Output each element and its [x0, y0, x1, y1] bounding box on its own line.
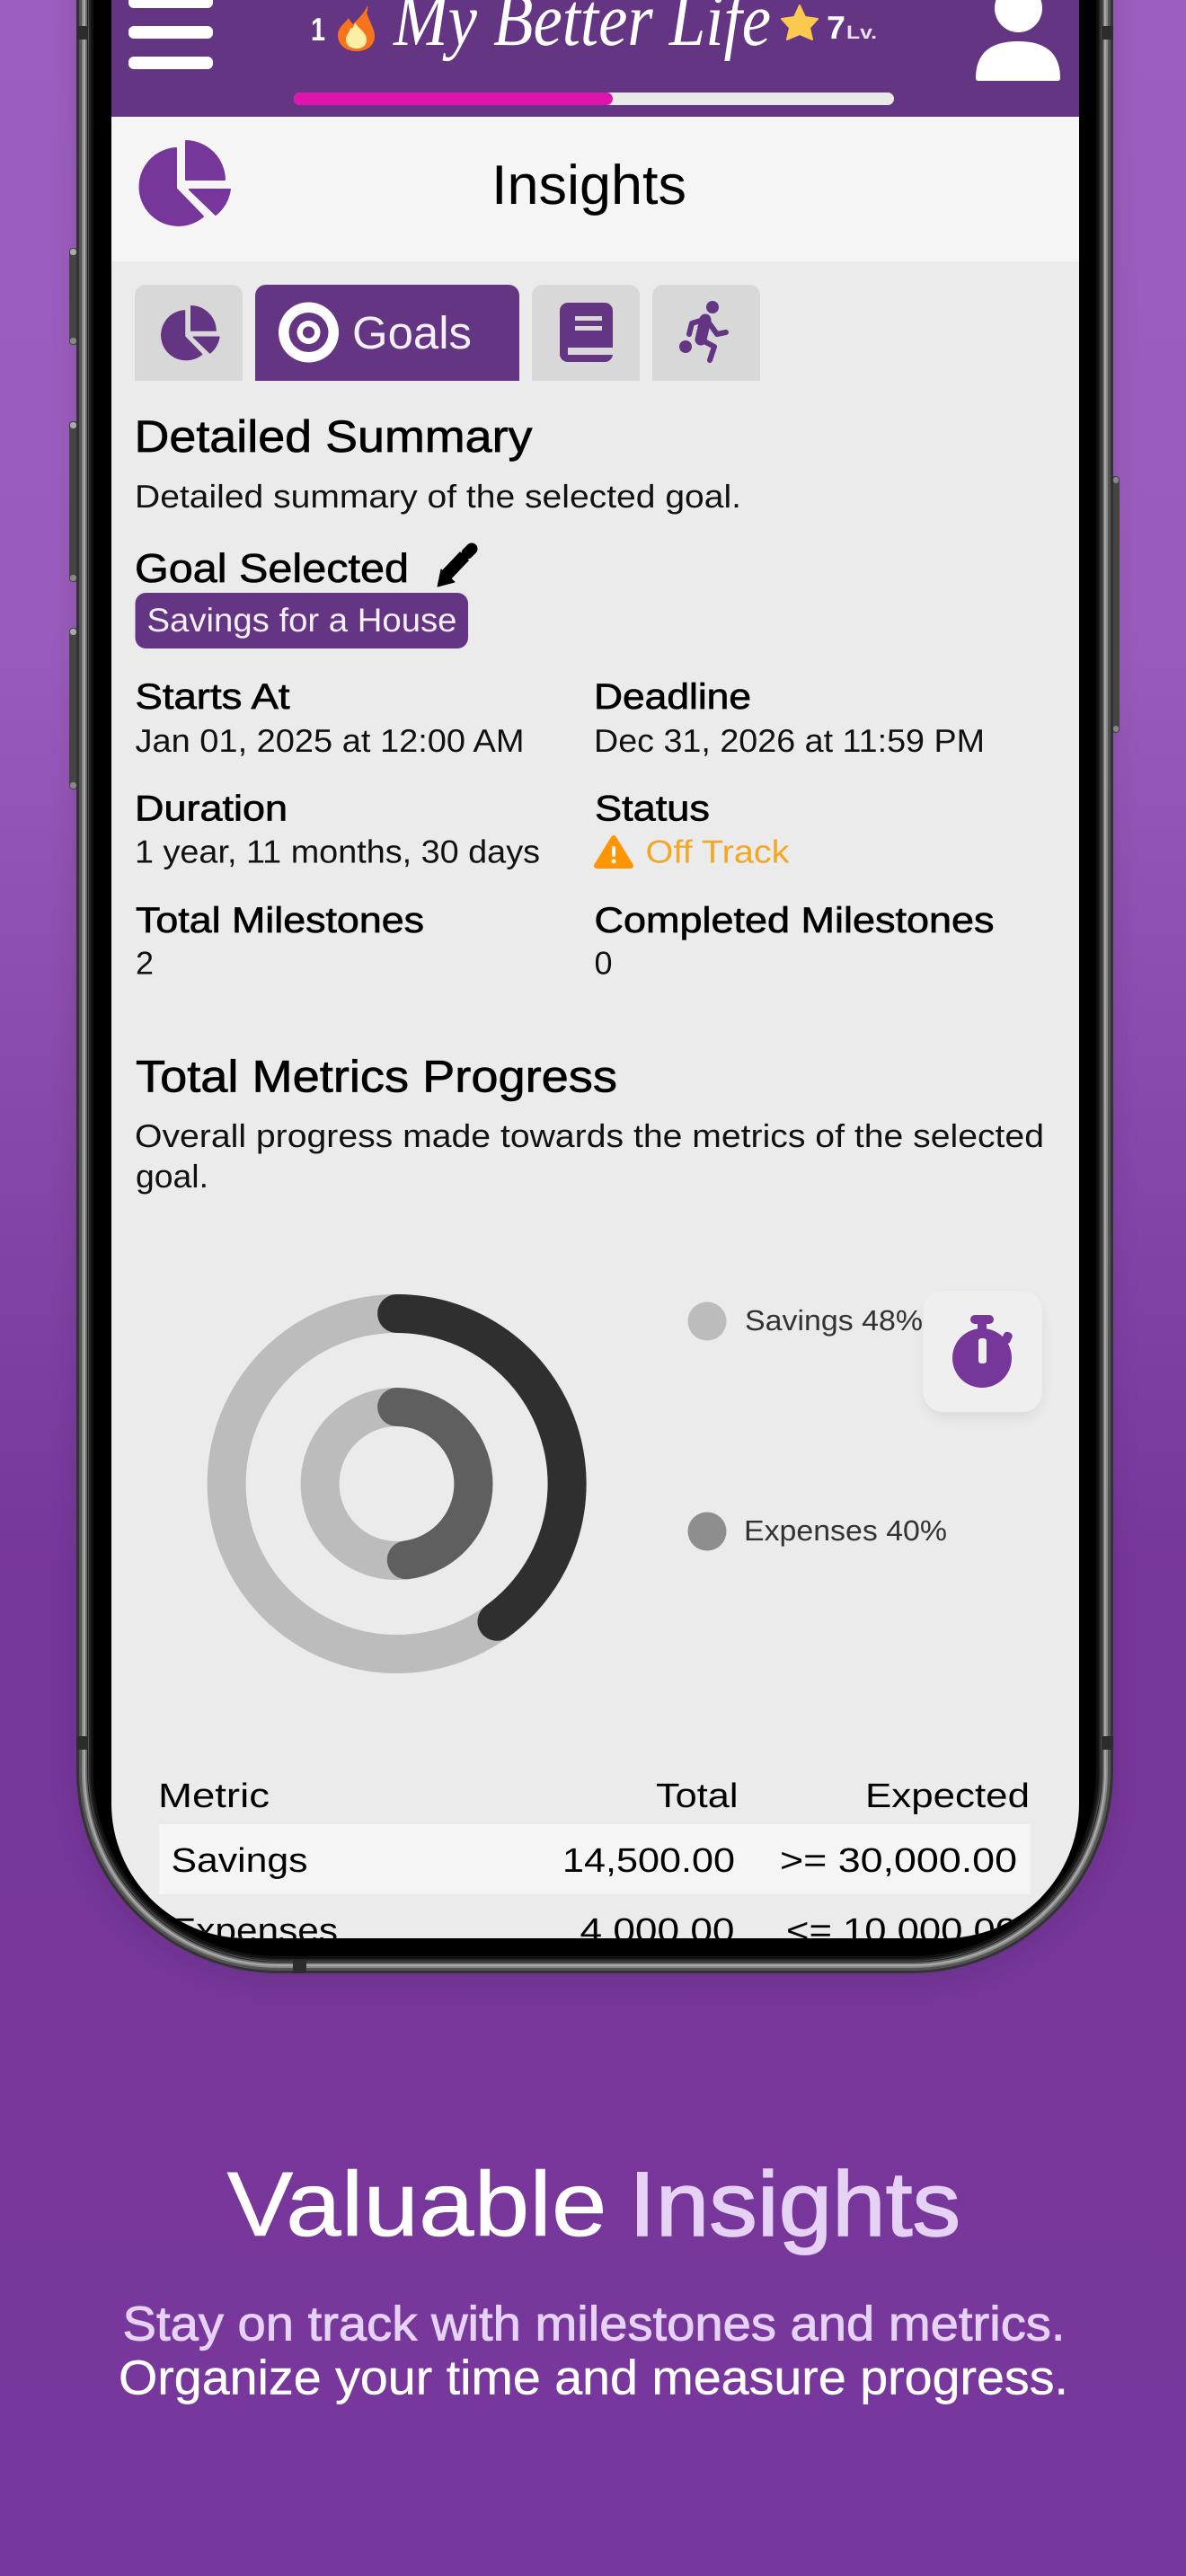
- total metrics heading: Total Metrics Progress: [136, 1051, 617, 1101]
- icon: warning: [597, 838, 631, 866]
- status: Status: [595, 789, 710, 828]
- status: [595, 789, 791, 869]
- row: expenses: Expenses: [171, 1912, 338, 1950]
- icon: pie chart: [140, 141, 230, 225]
- goal selected heading: Goal Selected: [135, 545, 409, 591]
- left side buttons: [69, 248, 78, 790]
- starts at: [136, 683, 521, 756]
- duration: Duration: [135, 789, 288, 828]
- phone screen: [111, 0, 1079, 1950]
- table header: [158, 1778, 1030, 1815]
- screen title: Insights: [491, 154, 686, 216]
- table header: Metric: [158, 1778, 270, 1815]
- icon: user: [976, 0, 1060, 81]
- phone frame: [69, 0, 1120, 1981]
- legend: expenses: [688, 1513, 947, 1550]
- floating timer button: [924, 1291, 1042, 1417]
- tab bar: [135, 285, 760, 381]
- donut chart: [226, 1313, 567, 1654]
- icon: star: [782, 5, 818, 40]
- row: expenses: <= 10,000.00: [786, 1912, 1017, 1950]
- icon: target: [279, 302, 339, 363]
- deadline: Deadline: [594, 677, 751, 717]
- selected goal pill: Savings for a House: [147, 602, 456, 639]
- row: savings: [159, 1824, 1030, 1894]
- table header: Expected: [865, 1778, 1030, 1815]
- starts at: Jan 01, 2025 at 12:00 AM: [135, 722, 525, 759]
- subheading line two: Organize your time and measure progress.: [119, 2351, 1068, 2405]
- detailed summary description: Detailed summary of the selected goal.: [135, 478, 741, 515]
- headline: Valuable: [226, 2153, 607, 2255]
- page title band: [111, 117, 1079, 261]
- duration: 1 year, 11 months, 30 days: [135, 834, 540, 869]
- icon: stopwatch: [952, 1315, 1013, 1388]
- completed milestones: [595, 905, 994, 975]
- total milestones: Total Milestones: [136, 901, 424, 940]
- total milestones: [137, 905, 423, 974]
- tab: activity: [652, 285, 760, 381]
- status: Off Track: [645, 834, 791, 869]
- tab: goals active: [255, 285, 519, 381]
- legend: savings: Savings 48%: [745, 1304, 923, 1337]
- icon: pencil: [438, 549, 472, 587]
- icon: flame: [338, 5, 375, 51]
- row: savings: >= 30,000.00: [780, 1842, 1017, 1880]
- deadline: [597, 683, 982, 756]
- progress bar: [294, 93, 894, 105]
- total metrics description: Overall progress made towards the metrics of the selected: [135, 1117, 1044, 1154]
- row: savings: Savings: [171, 1842, 307, 1880]
- row: expenses: 4,000.00: [580, 1912, 735, 1950]
- right side button: [1111, 476, 1120, 733]
- legend: savings: [688, 1302, 923, 1340]
- metrics table: [158, 1778, 1030, 1950]
- subheading line one: Stay on track with milestones and metrics.: [122, 2298, 1066, 2351]
- detailed summary heading: Detailed Summary: [135, 411, 532, 462]
- total milestones: 2: [136, 945, 154, 981]
- deadline: Dec 31, 2026 at 11:59 PM: [594, 722, 985, 759]
- headline: Insights: [629, 2153, 960, 2255]
- level label: 7: [827, 9, 845, 46]
- table header: Total: [656, 1778, 739, 1815]
- app header bar: Lv.: [846, 22, 877, 43]
- row: expenses: [171, 1912, 1017, 1950]
- completed milestones: Completed Milestones: [595, 901, 994, 940]
- duration: [135, 789, 540, 869]
- legend: expenses: Expenses 40%: [744, 1514, 947, 1547]
- starts at: Starts At: [135, 677, 289, 717]
- total metrics description: goal.: [136, 1158, 208, 1195]
- row: savings: 14,500.00: [562, 1842, 735, 1880]
- streak count: 1: [311, 11, 325, 48]
- icon: menu: [128, 0, 213, 69]
- tab label: Goals: [352, 307, 472, 358]
- tab: journal: [532, 285, 640, 381]
- app header bar: [111, 0, 1079, 117]
- headline: [226, 2153, 960, 2255]
- total metrics description: [135, 1117, 1044, 1195]
- selected goal pill: [135, 593, 468, 648]
- tab: overview: [135, 285, 243, 381]
- completed milestones: 0: [595, 945, 613, 981]
- summary details grid: [135, 677, 994, 981]
